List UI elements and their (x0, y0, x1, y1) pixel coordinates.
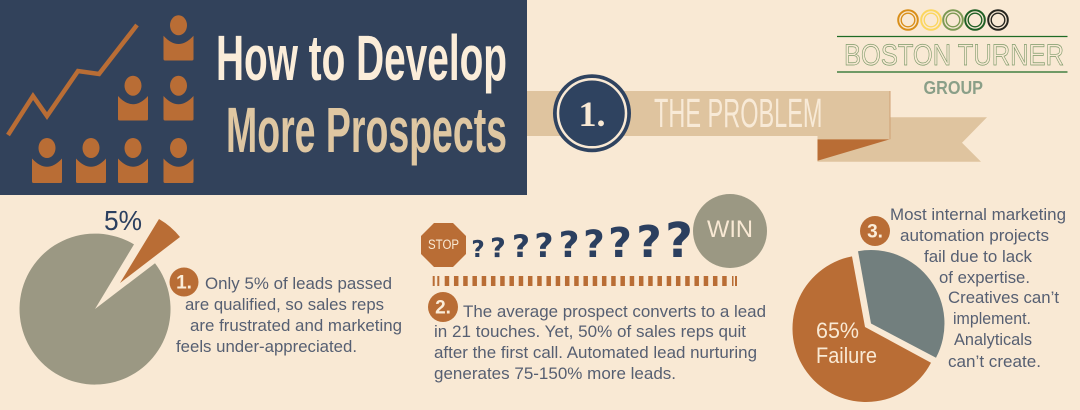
icon: people pyramid (32, 15, 194, 183)
icon: growing question marks (471, 213, 693, 269)
text block 2: after the first call. Automated lead nurturing (434, 344, 757, 362)
text block 1: Only 5% of leads passed (205, 275, 392, 293)
icon: growing question marks: ? (490, 233, 506, 264)
pie chart: 5 percent (20, 205, 180, 385)
text block 1 (176, 275, 402, 356)
text block 2: in 21 touches. Yet, 50% of sales reps quit (434, 323, 746, 341)
logo: Boston Turner Group (837, 10, 1068, 98)
icon: growing question marks: ? (608, 219, 632, 267)
text block 3: Analyticals (954, 331, 1032, 349)
badge 1: 1. (176, 272, 192, 294)
title (216, 22, 507, 166)
badge 2 (428, 292, 458, 322)
text block 3: automation projects (900, 227, 1049, 245)
badge 2: 2. (435, 298, 451, 318)
panel: point 2, touches to convert (421, 194, 767, 383)
text block 1: are qualified, so sales reps (185, 296, 384, 314)
pie chart: 65 percent failure (792, 250, 944, 402)
text block 3 (890, 206, 1066, 371)
text block 3: Most internal marketing (890, 206, 1066, 224)
section number medallion (553, 74, 631, 152)
title: How to Develop (216, 22, 507, 94)
text block 3: fail due to lack (924, 248, 1033, 266)
icon: stop sign (421, 223, 466, 267)
icon: growing question marks: ? (559, 225, 579, 266)
icon: win circle: WIN (707, 216, 753, 243)
text block 1: are frustrated and marketing (190, 317, 402, 335)
panel: point 1, qualified leads (20, 205, 402, 385)
section number medallion: 1. (578, 94, 606, 134)
panel: point 3, automation failure (792, 206, 1066, 402)
text block 3: can’t create. (948, 353, 1041, 371)
text block 2: generates 75-150% more leads. (434, 365, 676, 383)
text block 2 (434, 303, 766, 383)
pie chart: 5 percent: 5% (104, 205, 142, 236)
pie chart: 65 percent failure: Failure (816, 343, 877, 368)
icon: growing question marks: ? (636, 217, 662, 268)
pie chart: 65 percent failure: 65% (816, 318, 859, 343)
icon: growing question marks: ? (471, 237, 485, 263)
text block 3: Creatives can’t (948, 289, 1059, 307)
text block 3: implement. (953, 310, 1031, 328)
text block 2: The average prospect converts to a lead (463, 303, 766, 321)
badge 3: 3. (867, 222, 883, 242)
icon: stop sign: STOP (428, 237, 459, 252)
ribbon heading: THE PROBLEM (654, 90, 822, 136)
touch timeline (433, 276, 737, 286)
panel: header (0, 0, 527, 195)
badge 1 (170, 268, 198, 296)
logo subtitle: GROUP (924, 78, 983, 98)
badge 3 (860, 216, 890, 246)
icon: growing question marks: ? (665, 213, 693, 269)
text block 1: feels under-appreciated. (176, 338, 357, 356)
ribbon: the problem (527, 74, 987, 162)
icon: rising trend line (8, 25, 137, 135)
icon: growing question marks: ? (583, 223, 605, 266)
logo rings (898, 10, 1008, 30)
icon: growing question marks: ? (512, 229, 530, 265)
title: More Prospects (226, 94, 507, 166)
icon: win circle (693, 194, 767, 268)
text block 3: of expertise. (939, 269, 1030, 287)
icon: growing question marks: ? (534, 226, 554, 265)
